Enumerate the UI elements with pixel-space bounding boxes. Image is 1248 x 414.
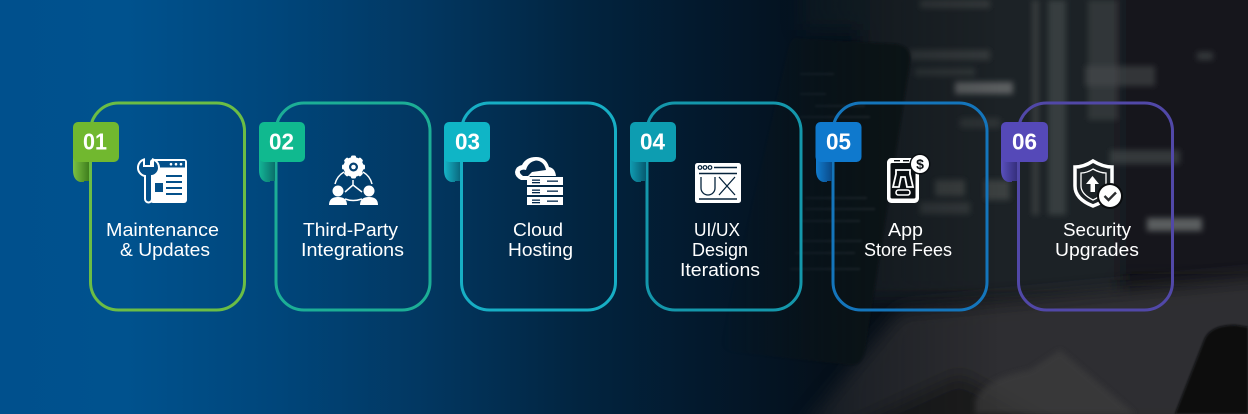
number badge: [630, 122, 676, 182]
number badge: 01: [83, 128, 107, 154]
label: & Updates: [120, 239, 210, 260]
label: Maintenance: [106, 219, 219, 240]
label: App: [888, 219, 923, 240]
icon: cloud and servers: [515, 157, 563, 205]
label: Third-Party: [303, 219, 399, 240]
number badge: 03: [455, 128, 480, 154]
desk and keyboard: [800, 275, 1248, 414]
number badge: 02: [269, 128, 294, 154]
label: Iterations: [680, 259, 760, 280]
number badge: [1001, 122, 1048, 182]
label: Cloud: [513, 219, 563, 240]
card outline: [1018, 103, 1172, 310]
card 3: Cloud Hosting: [444, 103, 616, 310]
card 2: Third-Party Integrations: [259, 103, 430, 310]
label: Security: [1063, 219, 1132, 240]
number badge: 05: [826, 128, 851, 154]
number badge: [816, 122, 862, 182]
number badge: [444, 122, 490, 182]
label: Hosting: [508, 239, 573, 260]
label: [508, 219, 573, 260]
label: [106, 219, 219, 260]
hand with second phone: [1175, 325, 1248, 414]
icon: phone with dollar coin: $: [916, 156, 924, 172]
icon: wrench and web page: [138, 159, 187, 203]
label: [1055, 219, 1139, 260]
label: [680, 219, 760, 280]
icon: shield with check: [1075, 161, 1123, 209]
card 5: App Store Fees: [816, 103, 987, 310]
label: Upgrades: [1055, 239, 1139, 260]
icon: phone with dollar coin: [887, 154, 930, 203]
icon: UX browser window: [695, 163, 741, 203]
icon: gear and connected people: [329, 156, 378, 205]
card 6: Security Upgrades: [1001, 103, 1172, 310]
card 4: UI/UX Design Iterations: [630, 103, 801, 310]
number badge: 04: [640, 128, 665, 154]
phone: [804, 42, 911, 364]
card outline: [462, 103, 616, 310]
label: Store Fees: [864, 239, 952, 260]
label: Design: [692, 239, 748, 260]
label: [864, 219, 952, 260]
card outline: [833, 103, 987, 310]
number badge: [73, 122, 119, 182]
card outline: [276, 103, 430, 310]
blurred code lines: [910, 0, 1213, 231]
card outline: [90, 103, 244, 310]
card outline: [647, 103, 801, 310]
label: [301, 219, 404, 260]
card 1: Maintenance & Updates: [73, 103, 244, 310]
number badge: [259, 122, 305, 182]
background photo: developer with phone and code screen: [804, 0, 1248, 414]
number badge: 06: [1012, 128, 1037, 154]
label: Integrations: [301, 239, 404, 260]
label: UI/UX: [694, 219, 740, 240]
monitor glow: [800, 0, 1248, 300]
